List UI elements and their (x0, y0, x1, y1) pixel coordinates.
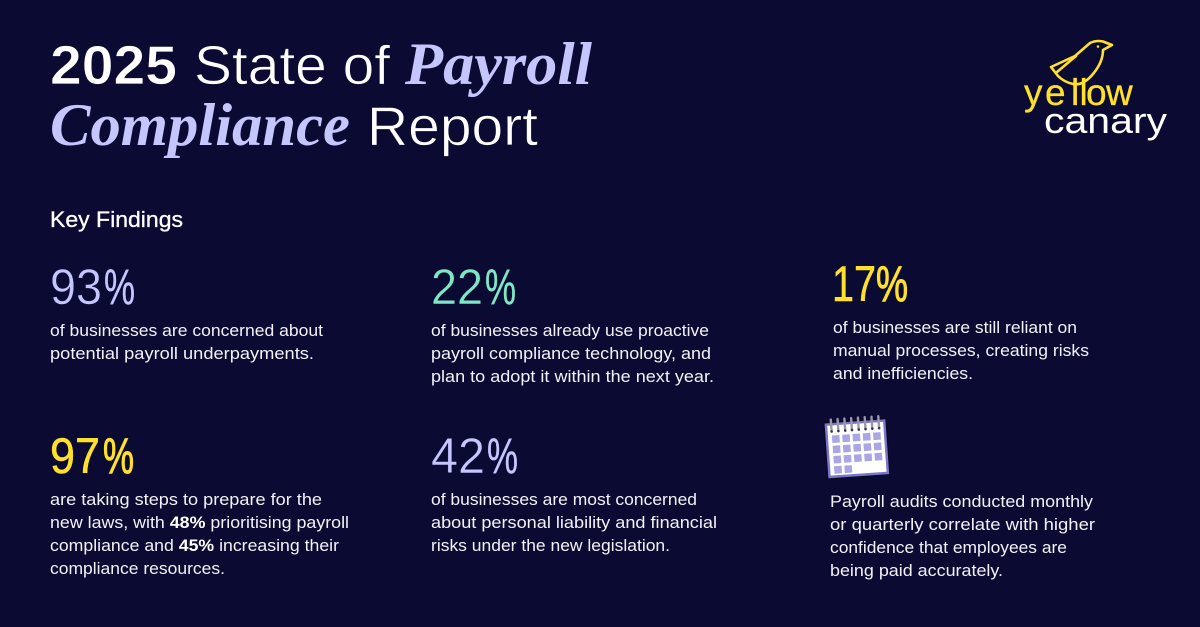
stat: 93%: % (104, 259, 135, 315)
stat: 42%: of businesses are most concerned (431, 491, 697, 509)
stat: 93% (50, 259, 323, 363)
stat: 97%: compliance resources. (50, 560, 225, 578)
icon: canary bird (1051, 41, 1112, 84)
stat: 17%: and inefficiencies. (833, 365, 973, 383)
text: payroll audits (830, 493, 1096, 580)
logo word: yellow: yellow (1024, 72, 1133, 113)
text: payroll audits: confidence that employees are (830, 539, 1067, 557)
stat: 93%: potential payroll underpayments. (50, 345, 314, 363)
stat: 17%: manual processes, creating risks (833, 342, 1089, 360)
stat: 42%: % (487, 428, 518, 484)
icon: calendar (824, 416, 890, 479)
text: payroll audits: Payroll audits conducted monthly (830, 493, 1094, 511)
stat: 17%: % (876, 256, 908, 312)
stat: 42% (431, 428, 717, 555)
stat: 17% (832, 256, 1089, 383)
stat: 22%: 22 (431, 259, 483, 315)
stat: 97% (50, 428, 349, 578)
title: Payroll (404, 31, 592, 97)
title: Compliance (50, 92, 350, 158)
stat: 17%: 17 (832, 256, 876, 312)
text: payroll audits: being paid accurately. (830, 562, 1003, 580)
stat: 97%: 97 (50, 428, 100, 484)
stat: 97%: new laws, with 48% prioritising payroll (50, 514, 349, 532)
logo: yellow canary (1024, 41, 1167, 141)
title (50, 31, 592, 158)
title: Report (367, 95, 538, 157)
heading: key findings: Key Findings (50, 207, 183, 232)
stat: 97%: % (103, 428, 134, 484)
stat: 17%: of businesses are still reliant on (833, 319, 1077, 337)
stat: 22%: plan to adopt it within the next year. (431, 368, 714, 386)
title: State of (194, 34, 391, 96)
stat: 93%: 93 (50, 259, 102, 315)
stat: 42%: about personal liability and financial (431, 514, 717, 532)
stat: 22%: payroll compliance technology, and (431, 345, 711, 363)
title: 2025 (50, 34, 177, 96)
stat: 42%: risks under the new legislation. (431, 537, 670, 555)
stat: 22% (431, 259, 714, 386)
stat: 22%: % (485, 259, 516, 315)
logo word: canary: canary (1044, 100, 1167, 141)
stat: 42%: 42 (431, 428, 485, 484)
stat: 97%: are taking steps to prepare for the (50, 491, 322, 509)
stat: 97%: compliance and 45% increasing their (50, 537, 340, 555)
stat: 22%: of businesses already use proactive (431, 322, 709, 340)
stat: 93%: of businesses are concerned about (50, 322, 323, 340)
text: payroll audits: or quarterly correlate with higher (830, 516, 1096, 534)
